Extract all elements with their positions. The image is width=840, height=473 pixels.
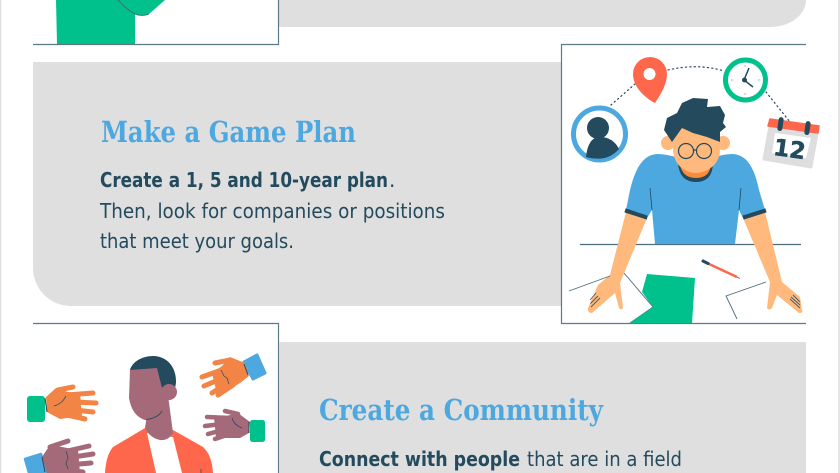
- text block: community description: that are in a field: [527, 447, 682, 471]
- icon: clock: [726, 60, 766, 100]
- left arm and hand: [588, 212, 647, 313]
- collar: [678, 164, 713, 182]
- text block: community description: [319, 447, 682, 471]
- text block: game plan description: that meet your goals.: [100, 229, 294, 253]
- illustration: papers and pencil: [569, 261, 766, 323]
- icon: person in circle: [574, 108, 626, 160]
- text block: game plan description: [99, 168, 445, 253]
- illustration: green shirt fragment: [56, 0, 165, 44]
- panel: community illustration: [25, 324, 278, 473]
- icon: calendar: [764, 117, 819, 167]
- neck: [145, 395, 173, 440]
- icon: mauve hand bottom left: [25, 441, 93, 473]
- panel: Create a Community card: [279, 342, 806, 473]
- panel: Make a Game Plan card: [33, 62, 562, 306]
- text block: community description: Connect with people: [319, 447, 520, 471]
- illustration: desk line: [580, 244, 801, 246]
- face: [673, 125, 720, 173]
- dotted path between icons: [611, 67, 790, 122]
- hair: [130, 356, 176, 390]
- ears: [661, 136, 675, 150]
- right arm and hand: [743, 212, 803, 313]
- panel: game plan illustration: [562, 44, 819, 324]
- jacket: [105, 428, 213, 473]
- illustration: man at desk: [588, 98, 803, 313]
- icon: calendar: 12: [772, 135, 807, 165]
- illustration: central person: [105, 356, 213, 473]
- glasses: [678, 144, 712, 158]
- icon: map pin: [633, 57, 667, 103]
- icon: orange hand left: [27, 387, 96, 422]
- hair: [664, 98, 726, 142]
- panel: top illustration frame: [33, 0, 278, 44]
- text block: game plan description: .: [389, 168, 395, 192]
- panel: top card remnant: [278, 0, 806, 27]
- torso and shirt: [626, 154, 765, 244]
- icon: orange hand top right: [202, 355, 265, 395]
- heading: Make a Game Plan: Make a Game Plan: [101, 115, 356, 149]
- text block: game plan description: Then, look for companies or positions: [99, 199, 445, 223]
- heading: Create a Community: Create a Community: [319, 393, 604, 427]
- icon: mauve hand right: [205, 411, 265, 442]
- text block: game plan description: Create a 1, 5 and 10-year plan: [100, 168, 388, 192]
- face: [129, 368, 166, 420]
